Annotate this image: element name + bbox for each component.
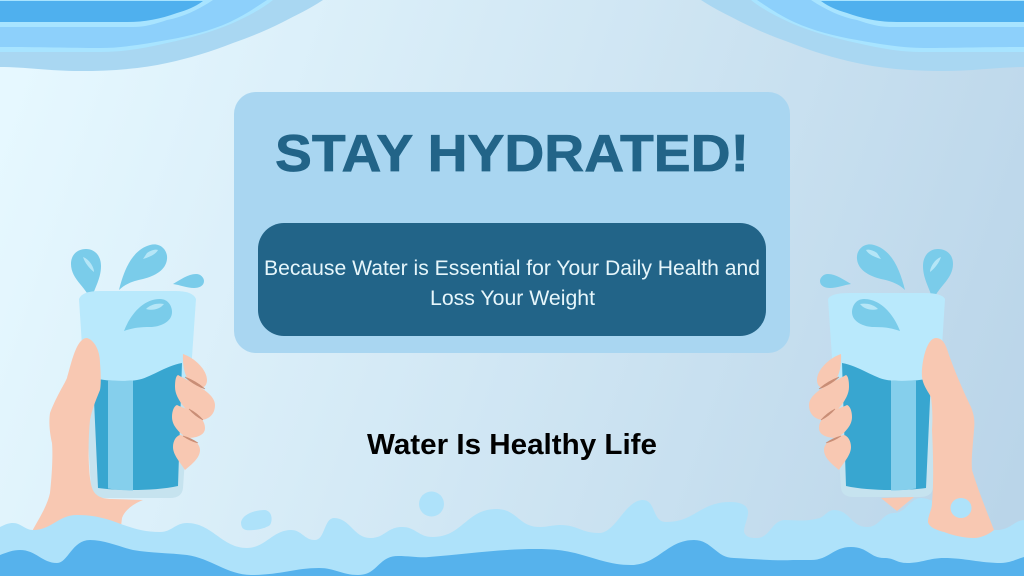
tagline: Water Is Healthy Life [367, 429, 657, 461]
finger creases [183, 377, 205, 443]
right wrist behind water [881, 497, 914, 511]
arm and thumb [922, 338, 994, 538]
light wave [0, 498, 1024, 576]
title card [234, 92, 790, 353]
subtitle panel [258, 223, 766, 336]
left hand holding glass [30, 244, 215, 535]
finger creases [819, 377, 841, 443]
dark wave [0, 540, 1024, 576]
title: STAY HYDRATED! [275, 125, 749, 183]
icon: drop in glass [852, 299, 900, 331]
top-left water curtain [0, 0, 323, 71]
water in glass [93, 363, 182, 490]
subtitle text: Loss Your Weight [430, 287, 595, 310]
right hand holding glass [809, 244, 994, 538]
water in glass [842, 363, 931, 490]
icon: water splash drops [820, 244, 953, 302]
bubble on wrist [950, 498, 972, 518]
fingers [172, 354, 215, 470]
top-right water curtain [701, 0, 1024, 71]
fingers [809, 354, 852, 470]
water bubbles [241, 492, 444, 530]
subtitle text: Because Water is Essential for Your Daily Health and [264, 257, 760, 280]
icon: water splash drops [71, 244, 204, 302]
icon: glass [828, 293, 945, 497]
icon: drop in glass [124, 299, 172, 331]
subtitle text [264, 257, 760, 310]
arm and thumb [30, 338, 143, 535]
icon: glass [79, 291, 196, 498]
